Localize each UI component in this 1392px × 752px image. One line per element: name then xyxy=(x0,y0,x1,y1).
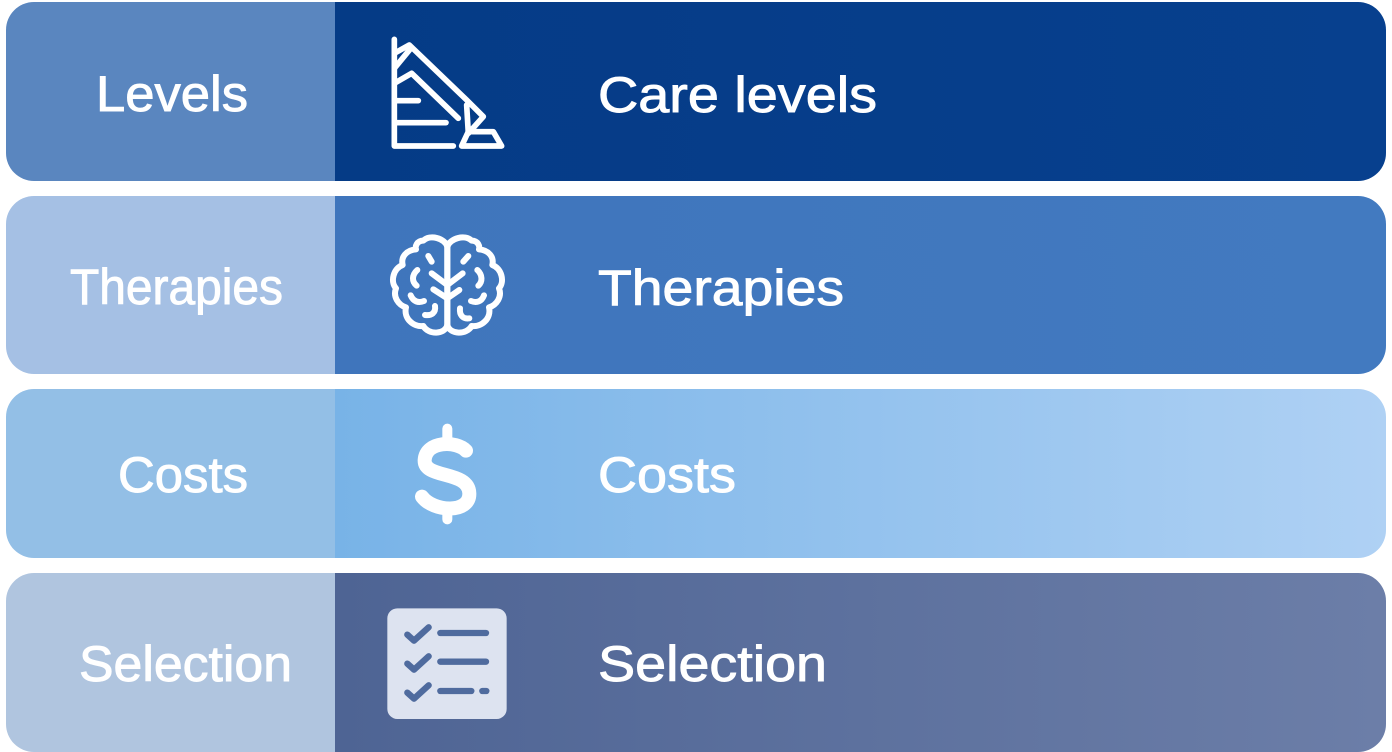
left label: Therapies: Therapies xyxy=(70,259,283,315)
panel: selection row xyxy=(6,573,1386,752)
panel: therapies row xyxy=(6,196,1386,374)
icon: dollar sign xyxy=(422,429,469,519)
right cell: therapies xyxy=(335,196,1386,374)
icon: checklist xyxy=(387,608,507,719)
left label cell: therapies xyxy=(6,196,335,374)
heading: Selection: Selection xyxy=(598,636,827,692)
right cell: selection xyxy=(335,573,1386,752)
panel: costs row xyxy=(6,389,1386,558)
left label cell: selection xyxy=(6,573,335,752)
icon: brain xyxy=(393,237,502,333)
left label cell: levels xyxy=(6,2,335,181)
left label cell: costs xyxy=(6,389,335,558)
heading: Care levels: Care levels xyxy=(598,67,877,123)
right cell: care levels xyxy=(335,2,1386,181)
left label: Costs: Costs xyxy=(118,447,248,503)
heading: Costs: Costs xyxy=(598,447,736,503)
left label: Levels: Levels xyxy=(96,66,248,122)
right cell: costs xyxy=(335,389,1386,558)
heading: Therapies: Therapies xyxy=(598,260,844,316)
icon: pyramid levels xyxy=(394,39,502,146)
left label: Selection: Selection xyxy=(79,636,292,692)
panel: care levels row xyxy=(6,2,1386,181)
